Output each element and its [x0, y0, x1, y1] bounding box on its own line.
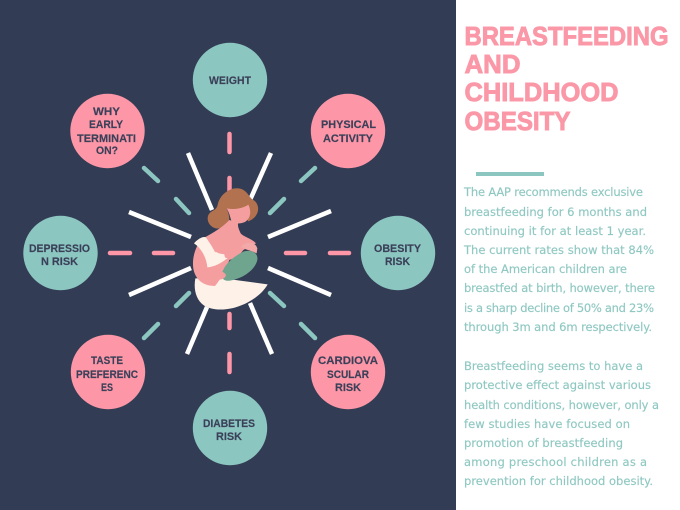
text block: protective effect: among preschool children as a [464, 455, 647, 469]
node: taste preferences [71, 335, 145, 409]
forearm [223, 248, 240, 258]
title [464, 21, 668, 136]
node: taste preferences: ES [101, 382, 113, 394]
text block: AAP recommendations: The current rates show that 84% [463, 243, 654, 257]
icon: breastfeeding mother and baby [193, 188, 268, 310]
title: AND [464, 49, 520, 79]
teal dashes [144, 168, 315, 338]
node: diabetes risk: RISK [216, 431, 242, 443]
text block: protective effect: health conditions, however, only a [464, 398, 659, 412]
face [227, 205, 250, 223]
torso and arm [193, 220, 256, 286]
text block: protective effect [464, 359, 659, 488]
node: physical activity: ACTIVITY [323, 133, 374, 145]
baby head [241, 243, 257, 253]
node: obesity risk: OBESITY [374, 243, 422, 255]
text block: AAP recommendations: continuing it for at least 1 year. [464, 224, 646, 238]
text block: protective effect: prevention for childhood obesity. [464, 474, 653, 488]
node: depression risk [23, 216, 98, 290]
text block: protective effect: Breastfeeding seems to have a [464, 359, 643, 373]
node: depression risk: DEPRESSIO [29, 243, 90, 255]
node: why early termination: ON? [96, 145, 118, 157]
text block: protective effect: promotion of breastfeeding [464, 436, 623, 450]
node: why early termination [70, 94, 145, 168]
node: cardiovascular risk: RISK [335, 382, 361, 394]
node: weight [193, 43, 267, 117]
dress strap [194, 237, 216, 267]
node: why early termination: EARLY [89, 119, 124, 131]
node: diabetes risk [193, 391, 267, 465]
pink dashes [110, 134, 349, 372]
node: weight: WEIGHT [209, 75, 251, 87]
hair back [208, 188, 258, 229]
accent bar [476, 172, 544, 176]
node: taste preferences: PREFERENC [76, 369, 138, 381]
baby body [222, 251, 257, 281]
node: obesity risk [361, 216, 435, 290]
title: CHILDHOOD [464, 77, 618, 107]
white rays [129, 153, 331, 354]
node: diabetes risk: DIABETES [203, 418, 255, 430]
node: physical activity [311, 94, 385, 168]
node: cardiovascular risk: CARDIOVA [318, 355, 378, 367]
text block: protective effect: few studies have focused on [464, 417, 630, 431]
text block: AAP recommendations: The AAP recommends exclusive [463, 185, 643, 199]
text block: protective effect: protective effect against various [464, 378, 651, 392]
node: why early termination: WHY [93, 106, 121, 118]
node: why early termination: TERMINATI [77, 133, 136, 145]
title: OBESITY [464, 106, 570, 136]
node: obesity risk: RISK [385, 256, 410, 268]
skirt [195, 278, 268, 310]
text block: AAP recommendations: of the American children are [464, 262, 627, 276]
hand [215, 271, 226, 280]
node: cardiovascular risk: SCULAR [327, 369, 369, 381]
node: cardiovascular risk [311, 335, 385, 409]
left navy panel [0, 0, 456, 510]
text block: AAP recommendations: through 3m and 6m respectively. [464, 320, 652, 334]
node: taste preferences: TASTE [91, 355, 123, 367]
text block: AAP recommendations: breastfed at birth, however, there [464, 281, 655, 295]
node: depression risk: N RISK [41, 256, 78, 268]
dress bodice [207, 252, 230, 267]
node: physical activity: PHYSICAL [321, 119, 376, 131]
text block: AAP recommendations: breastfeeding for 6 months and [464, 205, 647, 219]
text block: AAP recommendations [463, 185, 655, 334]
text block: AAP recommendations: is a sharp decline of 50% and 23% [464, 301, 654, 315]
